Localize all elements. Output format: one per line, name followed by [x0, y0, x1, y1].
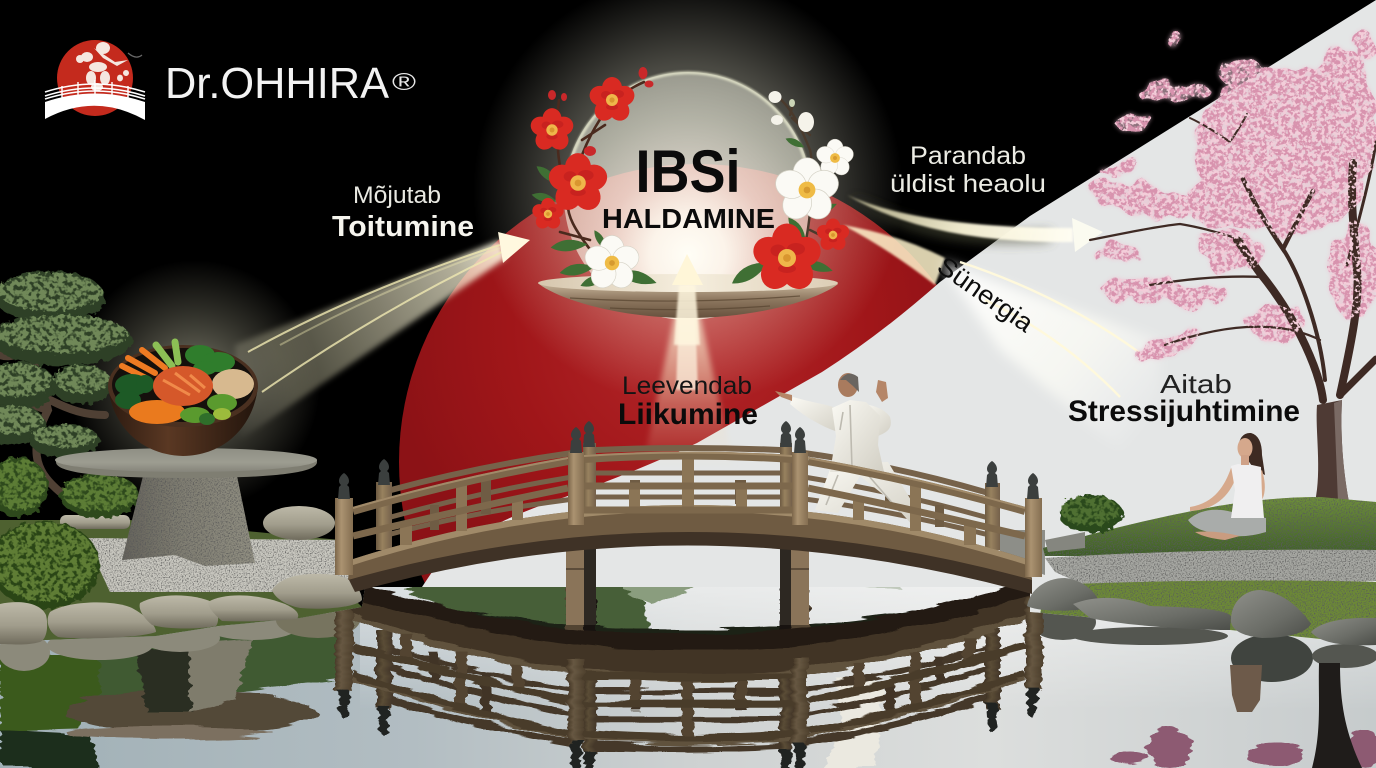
blossom soft pink mass [1088, 32, 1376, 371]
lower grass [1040, 581, 1376, 648]
glowing halo circle [564, 72, 812, 320]
back shrubs [0, 457, 140, 518]
man legs [815, 462, 920, 527]
right leaves [784, 135, 806, 150]
red and white left flowers [587, 77, 637, 125]
light diagonal background [400, 0, 1376, 620]
blossom base layer [1088, 32, 1376, 371]
trunk light side [1334, 400, 1349, 502]
bridge back structure [376, 421, 1000, 550]
central wooden dish [538, 274, 838, 318]
upward arrow head over dish [672, 254, 703, 285]
left garden [0, 271, 365, 650]
rock reflections [0, 602, 1376, 712]
arrow beam: nutrition to centre [235, 232, 530, 440]
label: wellbeing [890, 142, 1046, 198]
hair [1238, 433, 1265, 475]
gravel path [1045, 550, 1376, 592]
stepping stones [1045, 532, 1085, 552]
small bush [1059, 495, 1123, 533]
gravel bed [85, 538, 350, 592]
back shrub highlights [0, 458, 138, 511]
label: movement [618, 372, 758, 431]
centre heading: HALDAMINE [602, 203, 775, 234]
logo bridge [45, 80, 145, 120]
flower wreath left: red blossoms [528, 67, 658, 293]
left buds [548, 67, 654, 156]
cherry blossom tree [1088, 32, 1376, 502]
pink blossom reflection [1112, 728, 1376, 768]
logo bird [128, 53, 142, 57]
label: synergy: Sünergia [932, 250, 1040, 338]
red sun disc [399, 164, 995, 760]
clothing shadow [826, 405, 900, 512]
tree reflection right [1312, 663, 1362, 768]
centre heading [602, 138, 775, 234]
label: movement: Leevendab [622, 372, 752, 400]
man head [838, 373, 858, 397]
logo wordmark: ® [392, 69, 416, 96]
glow behind bowl [70, 260, 320, 510]
kimchi centre [153, 366, 213, 406]
legs [1188, 510, 1266, 536]
food bowl [108, 342, 258, 456]
arrow beam: synergy fan to stress management [843, 225, 1160, 450]
spinach left [115, 374, 154, 409]
stone table top [55, 448, 317, 478]
label: stress management: Stressijuhtimine [1068, 395, 1300, 428]
bonsai foliage highlight [0, 273, 128, 447]
carrot sticks [122, 350, 165, 378]
neck [1241, 455, 1249, 465]
back flat rock [60, 515, 130, 529]
arms [1190, 468, 1265, 513]
shredded carrot [129, 400, 185, 424]
shoreline rocks left [0, 574, 362, 644]
sky sheen on water [360, 587, 1376, 686]
head [1238, 438, 1252, 458]
green peppers [180, 394, 237, 425]
upward arrow stem over dish [674, 285, 700, 345]
man raised arm [860, 404, 891, 436]
bonsai foliage dark [0, 271, 132, 458]
flowers [814, 139, 856, 178]
back stones by bridge [1000, 530, 1045, 575]
right branch [775, 95, 830, 240]
logo blossoms [76, 42, 129, 91]
front shrub [0, 521, 100, 609]
label: wellbeing: Parandab [910, 142, 1026, 170]
water pond [0, 587, 1376, 768]
man hair [840, 374, 859, 392]
feet [1195, 532, 1240, 540]
shoreline rocks right [1027, 578, 1376, 645]
man torso [830, 400, 884, 472]
mirrored bridge rails and posts [332, 587, 1044, 768]
man arms [790, 397, 843, 432]
left green reflections [0, 650, 105, 732]
left branch [556, 82, 644, 252]
stone table reflection [67, 689, 317, 733]
label: wellbeing: üldist heaolu [890, 170, 1046, 198]
outer glow around halo [473, 0, 903, 405]
dark arch band of reflection [360, 591, 922, 636]
green tree reflection under bridge [0, 587, 1376, 768]
back grass and shore ground [0, 520, 365, 650]
man reflection [825, 680, 885, 768]
mushrooms [212, 369, 254, 399]
centre heading: IBSi [636, 138, 740, 205]
arrow beam: upward from movement [642, 282, 735, 470]
right garden [1000, 495, 1376, 648]
stone table base [122, 476, 255, 566]
bridge front structure [335, 427, 1042, 625]
celery sticks [156, 342, 178, 366]
flower wreath right: white blossoms [728, 91, 856, 295]
back rock right [263, 506, 335, 540]
label: stress management [1068, 369, 1300, 428]
trunk [1315, 400, 1349, 502]
label: nutrition [332, 182, 474, 243]
right buds [768, 91, 814, 132]
tank top [1231, 464, 1264, 518]
label: nutrition: Mõjutab [353, 182, 441, 209]
logo wordmark: Dr.OHHIRA [165, 59, 390, 108]
broccoli greens [185, 345, 235, 375]
branches over blossom [1090, 114, 1376, 400]
blossom light layer [1088, 32, 1376, 371]
logo: red sun with white bridge and blossoms [45, 40, 145, 120]
left leaves [534, 163, 560, 187]
grass hill [1043, 497, 1376, 556]
label: stress management: Aitab [1160, 369, 1232, 399]
tai chi man [775, 373, 920, 527]
man hands [775, 380, 888, 402]
label: nutrition: Toitumine [332, 211, 474, 243]
label: movement: Liikumine [618, 398, 758, 431]
meditating woman [1188, 433, 1266, 540]
bonsai trunk [0, 350, 105, 492]
arrow beam: wellbeing to blossom tree [847, 195, 1103, 252]
